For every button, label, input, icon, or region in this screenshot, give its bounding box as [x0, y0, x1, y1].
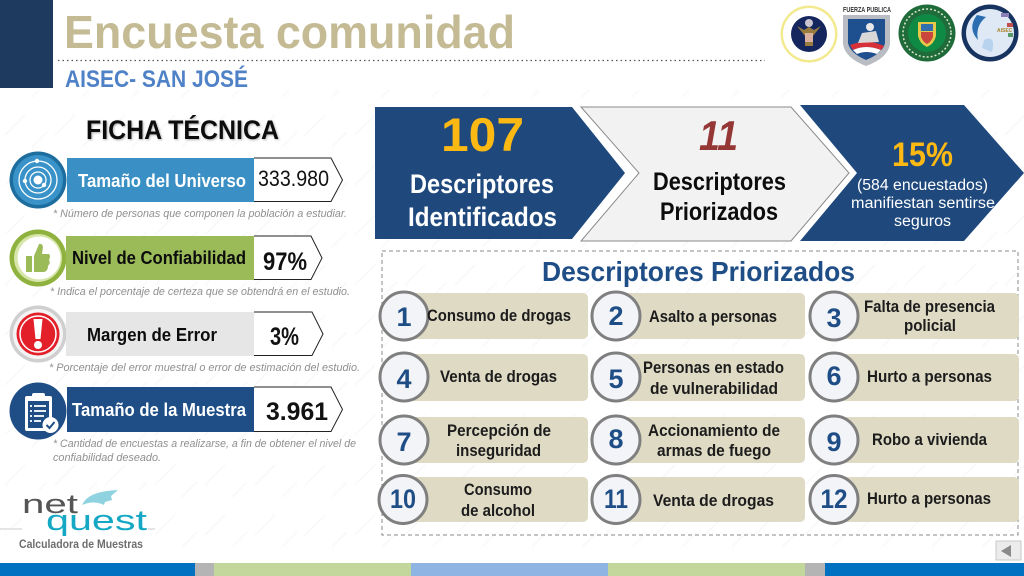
item 5: Personas en estado [643, 359, 784, 377]
item 3: policial [904, 317, 956, 335]
label: Nivel de Confiabilidad [72, 248, 246, 268]
logo: AISEC seal: AISEC [997, 28, 1013, 34]
value: 3% [270, 323, 299, 351]
item 12: 12 [820, 484, 848, 514]
item 10: de alcohol [461, 502, 535, 520]
item 11: Venta de drogas [653, 492, 774, 510]
logo: netquest calculator [0, 489, 155, 563]
logo: netquest calculator: quest [46, 505, 147, 537]
row: margen de error [10, 306, 360, 374]
item 7 [380, 416, 588, 464]
item 1: 1 [396, 302, 412, 332]
item 1: Consumo de drogas [427, 307, 571, 325]
label: Tamaño de la Muestra [72, 400, 247, 420]
number: 15% [892, 136, 953, 174]
item 6: 6 [826, 361, 842, 391]
note: * Número de personas que componen la población a estudiar. [53, 208, 347, 220]
label bar [67, 158, 254, 202]
value chevron [254, 236, 322, 280]
note [53, 438, 356, 464]
item 4: 4 [396, 364, 412, 394]
row: tamaño de la muestra [10, 382, 356, 464]
label: Descriptores [653, 168, 786, 196]
label bar [66, 236, 254, 280]
panel heading: Descriptores Priorizados [542, 256, 855, 287]
logo: Policia Colombia crest [898, 4, 956, 62]
item 5 [592, 353, 805, 401]
item 8: armas de fuego [657, 442, 771, 460]
icon: orbit [10, 152, 66, 208]
row: tamaño del universo [10, 152, 347, 220]
item 9: Robo a vivienda [872, 431, 988, 449]
icon: thumbs up [10, 230, 66, 286]
footer colour band [0, 563, 1024, 576]
item 7: 7 [396, 427, 412, 457]
item 4 [380, 353, 588, 401]
label [653, 168, 786, 226]
arrow: 107 descriptores identificados [375, 107, 625, 239]
item 6 [810, 353, 1019, 401]
item 8: Accionamiento de [648, 422, 780, 440]
item 10 [379, 476, 588, 524]
item 2 [592, 292, 805, 340]
item 2: 2 [608, 301, 624, 331]
note: confiabilidad deseado. [53, 452, 161, 464]
note: * Porcentaje del error muestral o error de estimación del estudio. [49, 362, 360, 374]
label: Identificados [408, 202, 557, 232]
label: Margen de Error [87, 325, 217, 345]
item 9: 9 [826, 427, 842, 457]
label: Descriptores [410, 169, 554, 199]
item 7: inseguridad [456, 442, 541, 460]
icon: back button [996, 541, 1021, 560]
number: 11 [699, 112, 738, 159]
note: * Indica el porcentaje de certeza que se obtendrá en el estudio. [50, 286, 350, 298]
number: 107 [441, 108, 524, 161]
heading: ficha tecnica: FICHA TÉCNICA [86, 114, 279, 145]
value: 333.980 [258, 166, 329, 191]
item 12 [810, 476, 1019, 524]
label [408, 169, 557, 232]
text: manifiestan sentirse [851, 195, 995, 212]
value chevron [254, 312, 323, 356]
panel: descriptores priorizados [379, 251, 1019, 535]
item 10: 10 [390, 484, 416, 514]
item 3 [810, 292, 1019, 340]
logos [780, 4, 1018, 66]
item 8 [592, 416, 805, 464]
item 11 [592, 476, 805, 524]
label: Priorizados [660, 198, 778, 226]
header block [0, 0, 53, 88]
logo: Fuerza Publica shield: FUERZA PUBLICA [843, 7, 891, 14]
arrow: 15 percent [800, 105, 1024, 241]
label: Tamaño del Universo [78, 171, 246, 191]
title: Encuesta comunidad [64, 6, 515, 58]
value chevron [254, 387, 342, 432]
item 4: Venta de drogas [440, 368, 557, 386]
logo: netquest calculator: net [22, 489, 79, 519]
item 3: 3 [826, 303, 842, 333]
item 3: Falta de presencia [864, 298, 996, 316]
item 2: Asalto a personas [649, 308, 777, 326]
value: 3.961 [266, 398, 328, 426]
item 5: de vulnerabilidad [650, 380, 778, 398]
logo: netquest calculator: Calculadora de Muestras [19, 539, 143, 551]
icon: clipboard [10, 382, 66, 440]
item 10: Consumo [464, 481, 532, 499]
item 12: Hurto a personas [867, 490, 991, 508]
text: (584 encuestados) [857, 177, 988, 194]
item 1 [380, 292, 588, 340]
value: 97% [263, 248, 307, 276]
arrow: 11 descriptores priorizados [581, 107, 849, 241]
logo: Fuerza Publica shield [843, 7, 891, 66]
item 5: 5 [608, 364, 624, 394]
value chevron [254, 158, 342, 202]
item 9 [810, 416, 1019, 464]
subtitle: AISEC- SAN JOSÉ [65, 65, 248, 93]
item 6: Hurto a personas [867, 368, 992, 386]
row: nivel de confiabilidad [10, 230, 350, 298]
item 8: 8 [608, 424, 624, 454]
logo: AISEC seal [962, 4, 1018, 62]
text [851, 177, 995, 230]
label bar [67, 387, 254, 432]
label bar [66, 312, 254, 356]
text: seguros [894, 213, 951, 230]
note: * Cantidad de encuestas a realizarse, a fin de obtener el nivel de [53, 438, 356, 450]
item 11: 11 [604, 484, 628, 514]
logo: US embassy seal [780, 6, 838, 62]
icon: alert [10, 306, 66, 362]
item 7: Percepción de [447, 422, 551, 440]
